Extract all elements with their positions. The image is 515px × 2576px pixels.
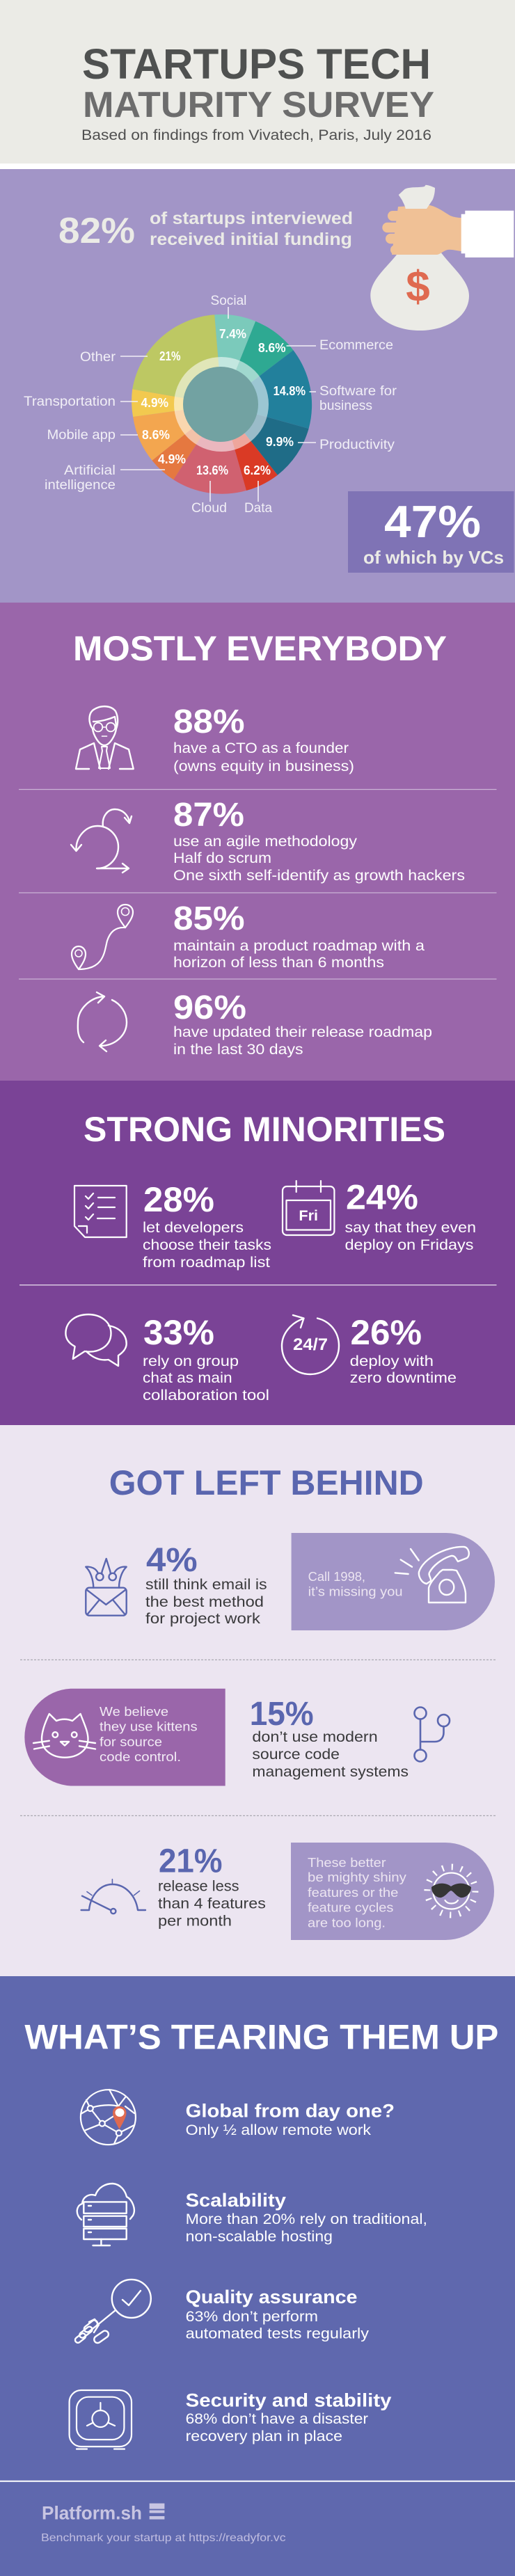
donut labels: Productivity	[319, 438, 395, 452]
slice values: 4.9%	[141, 396, 168, 410]
icon: 24/7 cycle	[282, 1315, 339, 1374]
donut labels: Transportation	[24, 395, 116, 409]
stat: 4%	[145, 1542, 267, 1627]
donut labels	[24, 294, 397, 516]
text: global from day one: Global from day one?	[186, 2100, 395, 2121]
donut labels: business	[319, 399, 372, 413]
text: quality assurance: automated tests regularly	[186, 2326, 370, 2342]
panel: strong minorities	[0, 1081, 515, 1425]
slice values: 14.8%	[274, 384, 306, 398]
panel: what's tearing them up	[0, 1976, 515, 2576]
slice: ecommerce	[222, 321, 293, 405]
heading: GOT LEFT BEHIND	[109, 1463, 424, 1502]
icon: code branch	[415, 1708, 450, 1762]
callout: shiny features	[291, 1843, 494, 1940]
slice values: 21%	[159, 349, 181, 363]
callout: shiny features: These better	[308, 1856, 386, 1870]
callout: kittens: We believe	[100, 1705, 168, 1719]
stat: 28%	[143, 1180, 271, 1271]
panel: mostly everybody	[0, 603, 515, 1081]
footer text: Benchmark your startup at https://readyfor.vc	[41, 2532, 286, 2544]
stat: 26%: 26%	[351, 1313, 422, 1352]
stat: 26%: deploy with	[350, 1353, 434, 1369]
slice values: 8.6%	[142, 428, 170, 442]
icon: safe	[70, 2390, 132, 2449]
heading: STRONG MINORITIES	[84, 1110, 445, 1149]
stat: 28%: from roadmap list	[143, 1255, 270, 1271]
icon: Friday calendar: Fri	[299, 1208, 318, 1224]
icon: globe with pin	[81, 2090, 136, 2145]
slice values: 7.4%	[219, 327, 246, 341]
text: security and stability: 68% don’t have a disaster	[186, 2411, 368, 2427]
icon: scrum arrows	[71, 809, 132, 873]
slice: social	[214, 315, 255, 405]
stat: 15%: 15%	[250, 1696, 314, 1733]
stat: 26%: zero downtime	[350, 1370, 457, 1386]
donut leader lines	[120, 307, 316, 502]
panel: got left behind	[0, 1425, 515, 1976]
stat: 26%	[350, 1313, 457, 1386]
stat: 85%: horizon of less than 6 months	[173, 955, 384, 971]
stat: 15%	[250, 1696, 409, 1780]
stat: 33%: rely on group	[143, 1353, 239, 1369]
stat: 33%: collaboration tool	[143, 1388, 269, 1404]
stat: 4%: 4%	[146, 1542, 198, 1579]
stat: 15%: don’t use modern	[252, 1729, 378, 1745]
callout: kittens: for source	[100, 1735, 162, 1749]
icon: magnifier check	[74, 2280, 151, 2344]
text: security and stability	[186, 2390, 391, 2444]
stat: 88%: have a CTO as a founder	[173, 740, 349, 756]
title: STARTUPS TECH	[82, 40, 431, 88]
slice values: 4.9%	[158, 452, 186, 466]
stat: 85%	[173, 900, 425, 971]
title	[82, 40, 434, 125]
stat: 85%: maintain a product roadmap with a	[173, 938, 425, 954]
icon: checklist	[74, 1186, 127, 1237]
slice: productivity	[222, 405, 309, 475]
slice: artificial intelligence	[152, 405, 222, 479]
icon: logo bars	[150, 2504, 164, 2520]
text: scalability: More than 20% rely on traditional,	[186, 2211, 427, 2227]
callout: 47% by VCs: of which by VCs	[363, 547, 504, 568]
slice values: 9.9%	[266, 435, 294, 449]
text: quality assurance: Quality assurance	[186, 2287, 358, 2307]
text: quality assurance: 63% don’t perform	[186, 2309, 318, 2325]
stat: 88%: 88%	[173, 703, 245, 740]
callout: 47% by VCs	[348, 491, 514, 573]
donut labels: Mobile app	[47, 428, 116, 443]
callout: shiny features: feature cycles	[308, 1901, 393, 1915]
donut labels: Social	[210, 294, 246, 308]
stat: 33%	[143, 1313, 269, 1404]
header panel	[0, 0, 515, 164]
stat: 87%: One sixth self-identify as growth hackers	[173, 868, 465, 884]
funding statistic: received initial funding	[150, 230, 352, 249]
stat: 4%: still think email is	[145, 1577, 267, 1593]
donut ring	[174, 357, 269, 452]
callout: kittens: they use kittens	[100, 1720, 198, 1734]
icon: 24/7 cycle: 24/7	[293, 1335, 328, 1354]
stat: 96%: have updated their release roadmap	[173, 1024, 432, 1040]
stat: 28%: choose their tasks	[143, 1237, 271, 1253]
stat: 24%: say that they even	[345, 1220, 476, 1236]
stat: 15%: source code	[252, 1747, 340, 1763]
donut chart	[132, 315, 312, 494]
text: global from day one: Only ½ allow remote work	[186, 2122, 372, 2138]
footer logo: Platform.sh	[42, 2503, 142, 2524]
icon: speed gauge	[81, 1879, 145, 1914]
text: quality assurance	[186, 2287, 370, 2342]
funding statistic: of startups interviewed	[150, 209, 353, 228]
callout: call 1998	[292, 1533, 495, 1630]
stat: 24%	[345, 1178, 476, 1253]
stat: 88%	[173, 703, 354, 774]
stat: 21%	[158, 1843, 266, 1930]
stat: 88%: (owns equity in business)	[173, 758, 354, 774]
donut labels: intelligence	[45, 478, 116, 493]
donut hole	[183, 367, 258, 442]
slice values: 6.2%	[244, 463, 271, 477]
stat: 24%: 24%	[346, 1178, 418, 1217]
stat: 33%: 33%	[143, 1313, 214, 1352]
icon: crowned email	[86, 1559, 127, 1616]
icon: cloud server	[77, 2184, 134, 2245]
slice values	[141, 327, 306, 477]
stat: 85%: 85%	[173, 900, 245, 937]
stat: 87%	[173, 797, 465, 884]
stat: 87%: 87%	[173, 797, 244, 834]
icon: hand holding money bag: $	[406, 263, 430, 311]
stat: 21%: release less	[158, 1879, 239, 1895]
text: scalability: non-scalable hosting	[186, 2229, 333, 2245]
slice: data	[222, 405, 278, 491]
icon: cat	[33, 1714, 95, 1758]
panel: funding	[0, 169, 515, 603]
stat: 21%: 21%	[159, 1843, 223, 1880]
text: scalability	[186, 2190, 427, 2245]
icon: chat bubbles	[65, 1314, 127, 1366]
slice values: 8.6%	[258, 341, 286, 355]
slice: software for business	[222, 350, 312, 429]
stat: 28%: 28%	[143, 1180, 214, 1219]
callout: shiny features: features or the	[308, 1886, 398, 1900]
text: global from day one	[186, 2100, 395, 2138]
slice: transportation	[132, 389, 222, 417]
callout: shiny features: are too long.	[308, 1916, 386, 1930]
icon: Friday calendar	[283, 1181, 334, 1235]
stat: 21%: per month	[158, 1914, 232, 1930]
stat: 87%: Half do scrum	[173, 850, 271, 866]
icon: roadmap route	[72, 905, 133, 969]
slice: mobile app	[133, 405, 222, 461]
slice: cloud	[173, 405, 246, 494]
icon: sun with sunglasses	[427, 1867, 475, 1915]
callout: shiny features: be mighty shiny	[308, 1870, 406, 1884]
icon: ringing phone	[395, 1547, 469, 1603]
donut labels: Cloud	[191, 501, 227, 516]
slice: other	[132, 315, 222, 405]
text: security and stability: recovery plan in place	[186, 2428, 342, 2444]
stat: 96%: 96%	[173, 989, 246, 1026]
subtitle: Based on findings from Vivatech, Paris, July 2016	[81, 127, 431, 143]
heading: WHAT’S TEARING THEM UP	[24, 2018, 498, 2057]
title: MATURITY SURVEY	[83, 85, 434, 125]
donut labels: Software for	[319, 384, 397, 399]
stat: 24%: deploy on Fridays	[345, 1237, 473, 1253]
stat: 4%: for project work	[145, 1611, 261, 1627]
funding statistic	[58, 209, 353, 251]
donut labels: Ecommerce	[319, 338, 393, 353]
text: scalability: Scalability	[186, 2190, 286, 2211]
donut labels: Artificial	[64, 463, 116, 478]
stat: 4%: the best method	[145, 1594, 264, 1610]
stat: 96%	[173, 989, 432, 1058]
text: security and stability: Security and stability	[186, 2390, 391, 2410]
heading: MOSTLY EVERYBODY	[73, 629, 447, 668]
icon: founder	[76, 706, 134, 769]
donut labels: Data	[244, 501, 272, 516]
callout: 47% by VCs: 47%	[384, 496, 481, 547]
stat: 28%: let developers	[143, 1220, 244, 1236]
callout: kittens: code control.	[100, 1750, 181, 1764]
callout: call 1998: it’s missing you	[308, 1585, 403, 1599]
stat: 33%: chat as main	[143, 1370, 232, 1386]
funding statistic: 82%	[58, 211, 135, 251]
donut labels: Other	[80, 350, 116, 365]
callout: kittens	[24, 1689, 225, 1786]
stat: 96%: in the last 30 days	[173, 1042, 303, 1058]
stat: 87%: use an agile methodology	[173, 834, 358, 850]
icon: refresh arrows	[78, 992, 127, 1051]
slice values: 13.6%	[196, 463, 228, 477]
stat: 21%: than 4 features	[158, 1896, 266, 1912]
callout: call 1998: Call 1998,	[308, 1570, 365, 1584]
stat: 15%: management systems	[252, 1764, 409, 1780]
icon: hand holding money bag	[370, 185, 514, 331]
